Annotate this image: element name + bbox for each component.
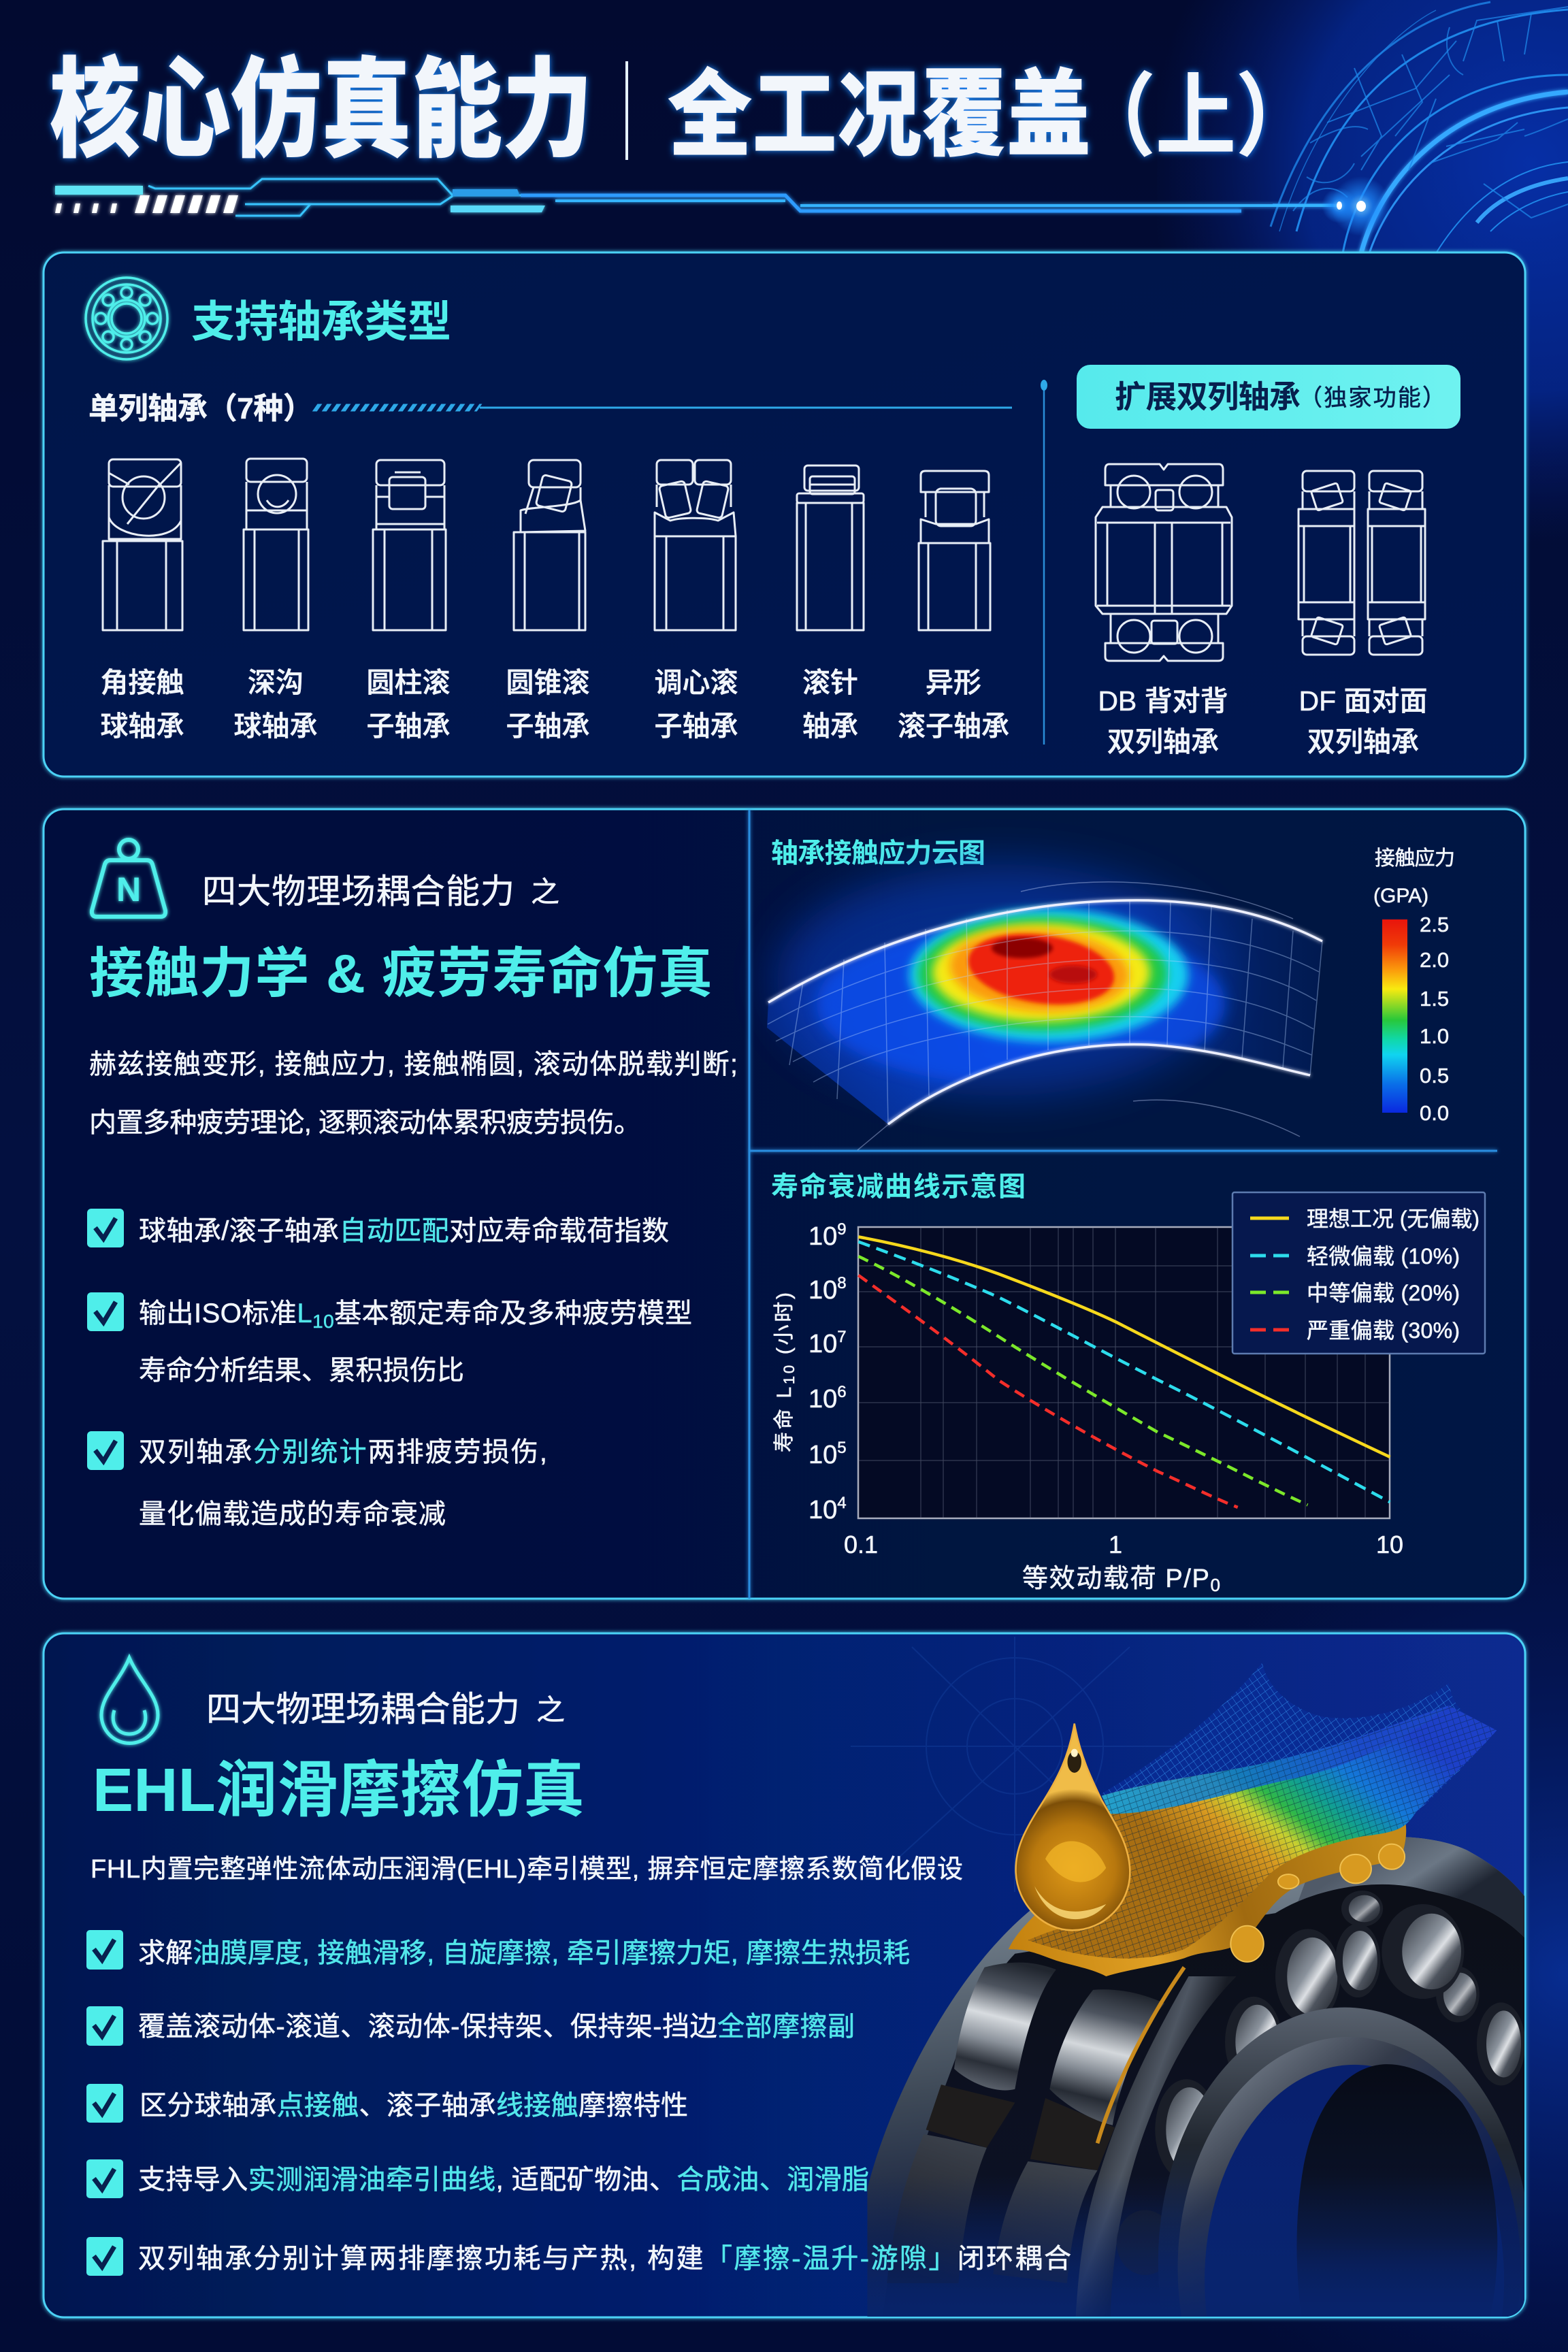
description (89, 1049, 738, 1138)
x axis ticks: 10 (1376, 1531, 1403, 1558)
check item 2: 10 (312, 1311, 334, 1332)
outer ring right highlight (1297, 1837, 1527, 1940)
bottom fade (867, 2175, 1527, 2317)
cage bars (926, 2085, 1115, 2170)
color bar legend: 接触应力 (1375, 847, 1455, 870)
title line glints (1322, 176, 1391, 236)
color bar legend: 0.5 (1420, 1064, 1449, 1088)
bearing labels: 球轴承 (234, 710, 317, 742)
top glossy sheet edge (1102, 1705, 1449, 1814)
icon: DF face-to-face double row (1298, 471, 1425, 655)
icon: force weight: N (116, 870, 141, 909)
description: FHL内置完整弹性流体动压润滑(EHL)牵引模型, 摒弃恒定摩擦系数简化假设 (91, 1855, 963, 1884)
decorative circuit arcs top right (1271, 2, 1568, 253)
chart: life decay curves (771, 1172, 1485, 1595)
icon: needle roller bearing (797, 466, 864, 630)
bearing labels: 球轴承 (101, 710, 184, 742)
y axis tick labels (808, 1220, 847, 1524)
y axis tick labels: 5 (837, 1439, 847, 1457)
legend: 中等偏载 (20%) (1307, 1281, 1460, 1305)
color bar legend: (GPA) (1373, 885, 1428, 907)
panel frame (44, 809, 1525, 1599)
title (50, 50, 1316, 172)
bearing labels: DB 背对背 (1098, 685, 1228, 717)
icon: oil drop (101, 1658, 158, 1743)
bearing labels: 子轴承 (366, 710, 451, 742)
plot area (858, 1227, 1390, 1518)
icon: angular contact ball bearing (103, 459, 182, 630)
subheading: single row: 单列轴承（7种） (88, 392, 313, 425)
bearing labels: 双列轴承 (1307, 726, 1419, 757)
inner ring (1158, 2008, 1531, 2317)
illustration: lubricated bearing (867, 1663, 1531, 2319)
panel frame (44, 1633, 1525, 2317)
check item 2 (87, 1292, 692, 1386)
icon: cylindrical roller bearing (373, 460, 446, 630)
title divider (625, 61, 628, 160)
check item 3: 双列轴承分别统计两排疲劳损伤, (139, 1437, 547, 1467)
curves (858, 1237, 1390, 1507)
outer ring (867, 1837, 1527, 2319)
bearing cavity (883, 1884, 1527, 2319)
check item 5: 双列轴承分别计算两排摩擦功耗与产热, 构建「摩擦-温升-游隙」闭环耦合 (138, 2244, 1071, 2274)
y axis title: (小时) (773, 1292, 796, 1362)
pill: extended double row: （独家功能） (1299, 385, 1446, 411)
bearing labels: 角接触 (101, 667, 184, 698)
bearing labels: 异形 (926, 667, 981, 698)
legend: 轻微偏载 (10%) (1307, 1244, 1460, 1269)
bearing labels (101, 667, 1428, 757)
check item 2: 覆盖滚动体-滚道、滚动体-保持架、保持架-挡边全部摩擦副 (138, 2012, 855, 2042)
section label: 四大物理场耦合能力 (206, 1690, 520, 1729)
chart title: 寿命衰减曲线示意图 (771, 1172, 1026, 1202)
balls (1117, 1891, 1525, 2275)
heading: 支持轴承类型 (191, 297, 451, 346)
legend (1232, 1192, 1485, 1354)
y axis tick labels: 9 (837, 1220, 847, 1239)
x axis title: 等效动载荷 P/P (1022, 1565, 1209, 1593)
bearing labels: 滚子轴承 (898, 710, 1009, 742)
heat blob (817, 909, 1225, 1085)
icon: deep groove ball bearing (244, 459, 308, 630)
back mesh lines (1102, 1663, 1497, 1823)
color bar legend (1373, 847, 1455, 1125)
check item 4: 支持导入实测润滑油牵引曲线, 适配矿物油、合成油、润滑脂 (138, 2165, 869, 2195)
icon: self-aligning roller bearing (655, 460, 736, 630)
stripe line (315, 404, 1012, 411)
gold edge (1098, 1967, 1184, 2143)
oil droplets (1230, 1844, 1405, 1962)
y axis tick labels: 10 (808, 1385, 837, 1414)
heading: 接触力学 & 疲劳寿命仿真 (89, 943, 713, 1004)
color bar legend: 2.5 (1420, 913, 1449, 936)
mesh grid (768, 900, 1322, 1124)
check item 3: 区分球轴承点接触、滚子轴承线接触摩擦特性 (140, 2091, 688, 2121)
front coloured sheet (1028, 1705, 1497, 1959)
section label: 四大物理场耦合能力 (202, 872, 514, 911)
bearing labels: 子轴承 (655, 710, 738, 742)
front mesh lines (1028, 1705, 1497, 1959)
color bar legend: 1.5 (1420, 987, 1449, 1011)
color bar legend: 2.0 (1420, 948, 1449, 972)
section label suffix: 之 (531, 876, 559, 908)
oil drop (1016, 1724, 1130, 1930)
icon: tapered roller bearing (514, 460, 585, 630)
section label suffix: 之 (536, 1694, 565, 1726)
bearing labels: 轴承 (802, 710, 858, 742)
legend: 理想工况 (无偏载) (1307, 1207, 1480, 1231)
bearing labels: 圆锥滚 (506, 667, 589, 698)
rollers (887, 1963, 1164, 2283)
panel: EHL lubrication (44, 1633, 1531, 2319)
icon: bearing (86, 278, 167, 359)
title tech decoration (55, 179, 1341, 216)
bearing labels: 双列轴承 (1107, 726, 1219, 757)
check item 2: 寿命分析结果、累积损伤比 (139, 1356, 464, 1386)
bearing labels: 深沟 (248, 667, 304, 698)
panel frame (44, 252, 1525, 777)
y axis tick labels: 10 (808, 1441, 837, 1469)
x axis ticks: 0.1 (844, 1531, 878, 1558)
title part two: 全工况覆盖 (668, 62, 1091, 168)
check item 3 (87, 1431, 547, 1529)
y axis tick labels: 6 (837, 1383, 847, 1401)
description: 内置多种疲劳理论, 逐颗滚动体累积疲劳损伤。 (89, 1108, 641, 1138)
y axis tick labels: 8 (837, 1274, 847, 1292)
back mesh sheet (1102, 1663, 1497, 1823)
title bracket: （上） (1075, 67, 1316, 167)
bearing labels: 调心滚 (655, 667, 738, 698)
icon: DB back-to-back double row (1096, 464, 1232, 661)
grid (858, 1227, 1390, 1518)
bearing labels: 子轴承 (506, 710, 589, 742)
check item 1: 球轴承/滚子轴承自动匹配对应寿命载荷指数 (139, 1216, 669, 1246)
icon: force weight (92, 840, 165, 917)
heat glow behind band (776, 864, 1225, 1096)
flange ring (1076, 1976, 1237, 2317)
decorative circuit circles (851, 1637, 1177, 1892)
y axis tick labels: 10 (808, 1276, 837, 1305)
vertical divider (1041, 380, 1047, 745)
y axis tick labels: 10 (808, 1496, 837, 1524)
gold oil film (1009, 1823, 1406, 1976)
legend: 严重偏载 (30%) (1307, 1318, 1460, 1343)
check item 2: 输出ISO标准L (139, 1298, 312, 1328)
x axis title: 0 (1211, 1575, 1220, 1595)
bearing labels: 滚针 (802, 667, 858, 698)
raceway outlines (768, 900, 1322, 1124)
y axis tick labels: 10 (808, 1330, 837, 1358)
y axis title: 10 (781, 1365, 798, 1384)
bearing labels: 圆柱滚 (366, 667, 451, 698)
y axis tick labels: 7 (837, 1328, 847, 1346)
y axis tick labels: 10 (808, 1222, 837, 1251)
x axis ticks (844, 1531, 1403, 1558)
pill: extended double row (1077, 365, 1460, 429)
outer faint arcs (858, 882, 1300, 1150)
y axis tick labels: 4 (837, 1494, 847, 1512)
panel: bearing types (44, 252, 1525, 777)
panel dividers (749, 810, 1497, 1599)
x axis ticks: 1 (1109, 1531, 1122, 1558)
color bar legend: 0.0 (1420, 1101, 1449, 1125)
description: 赫兹接触变形, 接触应力, 接触椭圆, 滚动体脱载判断; (89, 1049, 738, 1079)
check item 2: 基本额定寿命及多种疲劳模型 (334, 1298, 692, 1328)
title part one: 核心仿真能力 (50, 50, 593, 172)
chart title: 轴承接触应力云图 (771, 838, 985, 868)
bore inner surface (1296, 2064, 1497, 2317)
pill: extended double row: 扩展双列轴承 (1115, 379, 1301, 414)
heading: EHL润滑摩擦仿真 (93, 1757, 585, 1825)
color bar legend: 1.0 (1420, 1024, 1449, 1048)
stressed raceway band (767, 900, 1322, 1124)
panel: contact mechanics (44, 809, 1525, 1599)
bearing labels: DF 面对面 (1298, 685, 1428, 717)
y axis title: 寿命 L (773, 1387, 796, 1452)
chart: contact stress cloud (767, 838, 1455, 1150)
icon: special roller bearing (919, 471, 990, 630)
check item 1: 求解油膜厚度, 接触滑移, 自旋摩擦, 牵引摩擦力矩, 摩擦生热损耗 (138, 1938, 910, 1968)
check item 3: 量化偏载造成的寿命衰减 (139, 1499, 446, 1529)
